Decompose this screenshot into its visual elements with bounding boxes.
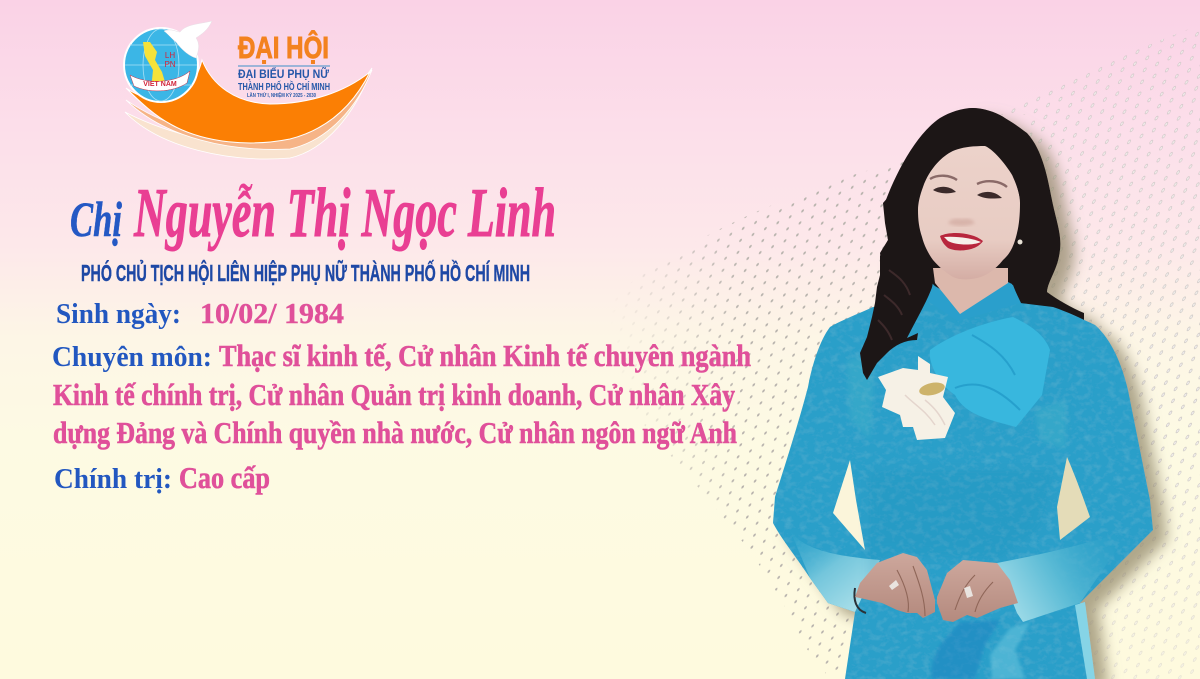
expertise: Kinh tế chính trị, Cử nhân Quản trị kinh doanh, Cử nhân Xây [53, 377, 735, 412]
expertise [52, 338, 751, 450]
neck [933, 268, 1008, 314]
ao dai side panel [1075, 602, 1095, 679]
logo emblem globe: LH [165, 51, 175, 60]
logo emblem globe [124, 28, 198, 102]
lotus flower [878, 356, 955, 440]
rings [889, 580, 973, 598]
birth date [56, 298, 344, 330]
logo event title: THÀNH PHỐ HỒ CHÍ MINH [238, 79, 330, 93]
halftone dot pattern: left lobe [610, 160, 905, 679]
eyebrows and eyes [930, 176, 1007, 199]
right sleeve cuff [997, 530, 1130, 622]
political level [54, 460, 270, 495]
hair front and braid [860, 108, 1038, 380]
ao dai body [773, 283, 1153, 679]
hair back [880, 108, 1084, 330]
logo emblem globe: VIET NAM [143, 81, 177, 88]
smile [940, 233, 983, 250]
collar [926, 281, 1021, 321]
logo event title: ĐẠI HỘI [238, 29, 329, 65]
portrait of woman in blue ao dai [773, 108, 1153, 679]
political level: Cao cấp [179, 460, 270, 495]
skirt flower detail [932, 620, 1030, 679]
logo event title [238, 29, 330, 99]
political level: Chính trị: [54, 463, 172, 495]
face [918, 146, 1020, 279]
earring [1018, 240, 1022, 244]
name heading [70, 175, 556, 252]
right hand [937, 560, 1018, 622]
arm gap left [833, 460, 865, 550]
expertise: Chuyên môn: [52, 341, 212, 373]
braid highlights [878, 270, 910, 340]
arm gap right [1057, 457, 1090, 540]
expertise: dựng Đảng và Chính quyền nhà nước, Cử nhân ngôn ngữ Anh [53, 415, 737, 450]
torso shading [868, 470, 1055, 600]
left sleeve cuff [790, 530, 880, 612]
logo swoosh layers [125, 60, 372, 159]
left cuff lining [854, 588, 866, 613]
painted leaf [930, 317, 1050, 427]
job title: PHÓ CHỦ TỊCH HỘI LIÊN HIỆP PHỤ NỮ THÀNH PHỐ HỒ CHÍ MINH [81, 258, 530, 286]
logo [124, 21, 372, 159]
birth date: 10/02/ 1984 [200, 298, 344, 330]
birth date: Sinh ngày: [56, 299, 181, 330]
name heading: Chị [70, 191, 122, 247]
finger lines [897, 566, 993, 616]
logo event title: LẦN THỨ I, NHIỆM KỲ 2025 - 2030 [247, 91, 316, 99]
yoke highlights [847, 355, 1066, 450]
name heading: Nguyễn Thị Ngọc Linh [133, 175, 556, 252]
nose [948, 219, 975, 226]
logo emblem globe: PN [164, 60, 176, 69]
halftone dot pattern: right field [1000, 25, 1200, 679]
expertise: Thạc sĩ kinh tế, Cử nhân Kinh tế chuyên ngành [219, 338, 751, 373]
left hand [855, 553, 935, 618]
logo dove [164, 21, 212, 58]
logo event title: ĐẠI BIỂU PHỤ NỮ [238, 68, 329, 81]
